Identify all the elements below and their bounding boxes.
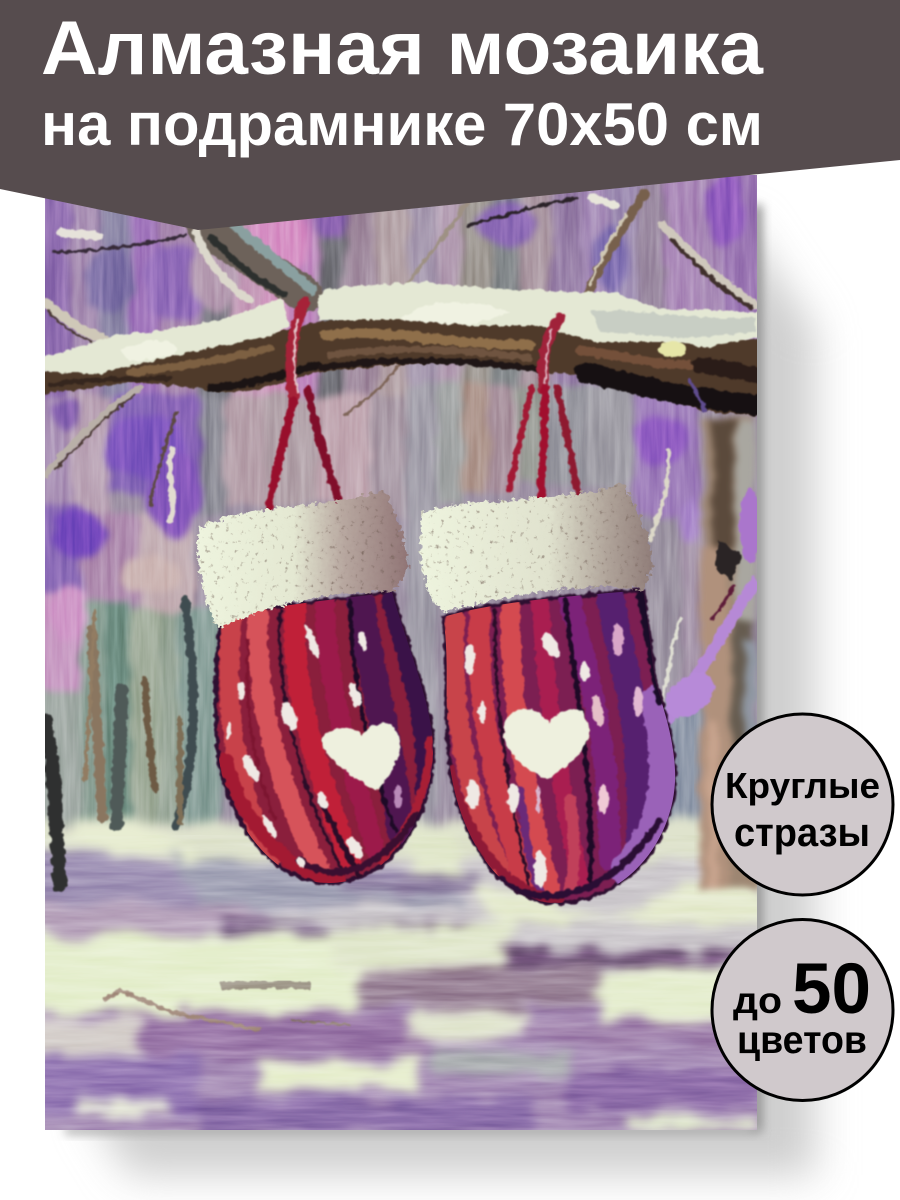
right mitten	[420, 483, 675, 903]
main snowy branch	[40, 282, 765, 415]
cuff right mitten	[420, 483, 653, 612]
spots right mitten	[465, 624, 643, 889]
snow ledge detail	[105, 985, 350, 1030]
heart left mitten	[322, 723, 400, 790]
bark strokes	[50, 333, 760, 410]
badge: up to 50 colours	[712, 920, 893, 1100]
purple foliage patches	[49, 172, 759, 643]
badge: up to 50 colours: цветов	[737, 1019, 867, 1062]
horizontal brush texture over the snow	[45, 835, 757, 1130]
vertical brush texture over the forest	[45, 175, 757, 835]
title line 2: на подрамнике 70х50 см	[41, 91, 763, 158]
snow on the branch	[40, 282, 765, 373]
painting: mittens on a winter branch	[20, 160, 780, 1152]
badge: round rhinestones: Круглые	[725, 765, 880, 806]
knit streaks left mitten	[225, 595, 430, 880]
upper background branches	[196, 193, 755, 308]
knit streaks right mitten	[450, 595, 664, 900]
header banner	[0, 0, 900, 230]
heart right mitten	[503, 709, 588, 780]
forest tree trunks on the left	[45, 600, 193, 885]
title	[41, 6, 764, 158]
badge: round rhinestones	[712, 714, 893, 895]
lilac strokes over the right trunk	[665, 487, 757, 725]
badge: up to 50 colours: 50	[792, 950, 871, 1029]
snowy ground	[20, 822, 780, 1152]
badge: up to 50 colours: до	[733, 980, 782, 1021]
title line 1: Алмазная мозаика	[41, 6, 764, 91]
pale scratched branches	[45, 195, 680, 700]
canvas drop shadow	[65, 205, 815, 1175]
badge: round rhinestones: стразы	[734, 811, 870, 855]
right mitten strings	[509, 318, 578, 497]
left mitten	[197, 490, 433, 883]
cuff left mitten	[197, 490, 410, 628]
spots left mitten	[226, 625, 402, 869]
painting background: purple forest	[45, 175, 757, 832]
left mitten strings	[269, 303, 340, 508]
right tree trunk	[700, 415, 758, 890]
